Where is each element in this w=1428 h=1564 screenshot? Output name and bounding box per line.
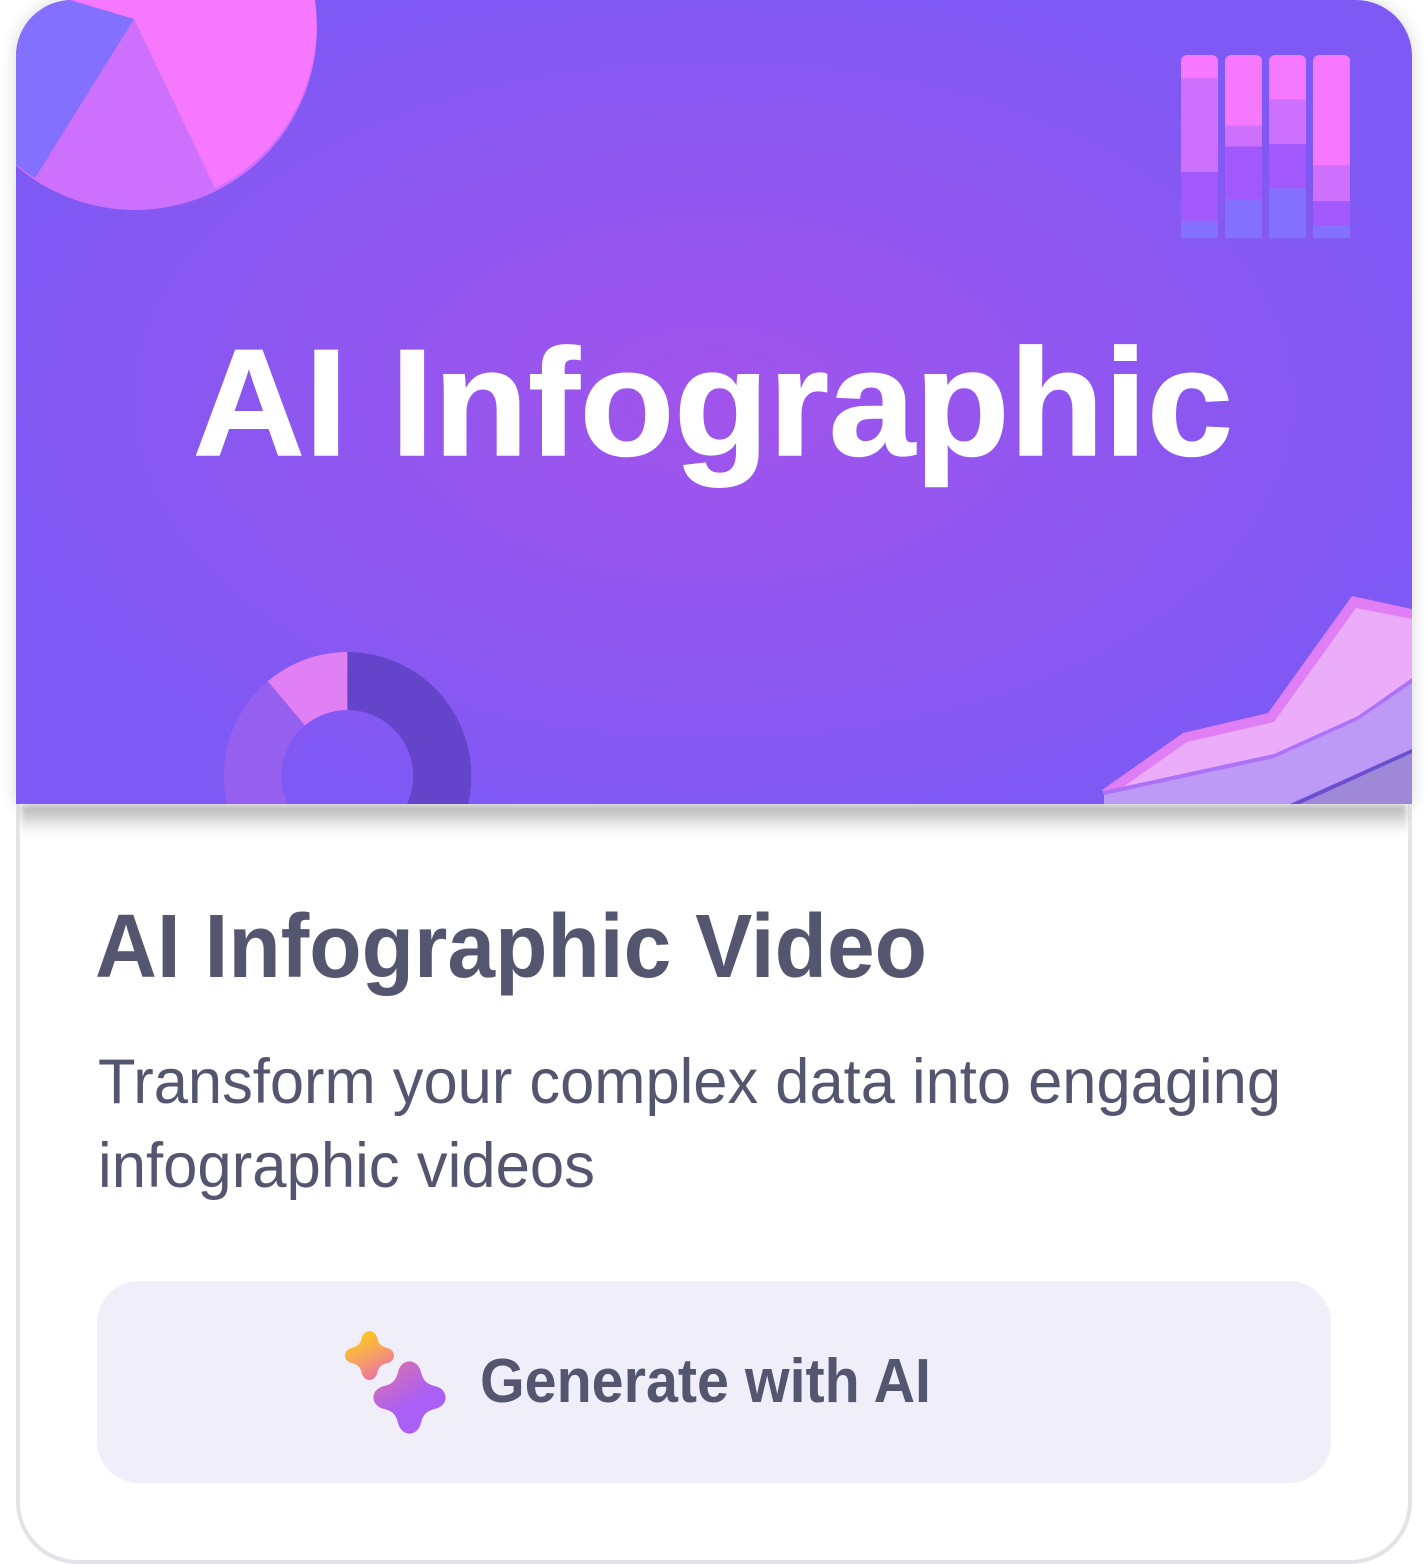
description — [98, 1047, 1281, 1201]
button label: Generate with AI — [480, 1347, 931, 1416]
area chart — [1102, 596, 1412, 804]
shadow under hero — [21, 804, 1407, 836]
card body — [18, 700, 1410, 1562]
hero banner — [16, 0, 1412, 804]
description: Transform your complex data into engaging — [98, 1047, 1281, 1117]
card title: AI Infographic Video — [95, 897, 927, 997]
hero title: AI Infographic — [193, 318, 1233, 488]
stacked bar chart — [1181, 55, 1350, 239]
hero background — [16, 0, 1412, 804]
generate button — [97, 1281, 1331, 1483]
pie chart — [0, 0, 317, 210]
description: infographic videos — [98, 1131, 595, 1201]
hero side shadow — [16, 0, 1412, 804]
icon: sparkles — [345, 1331, 446, 1434]
donut chart — [224, 652, 472, 804]
